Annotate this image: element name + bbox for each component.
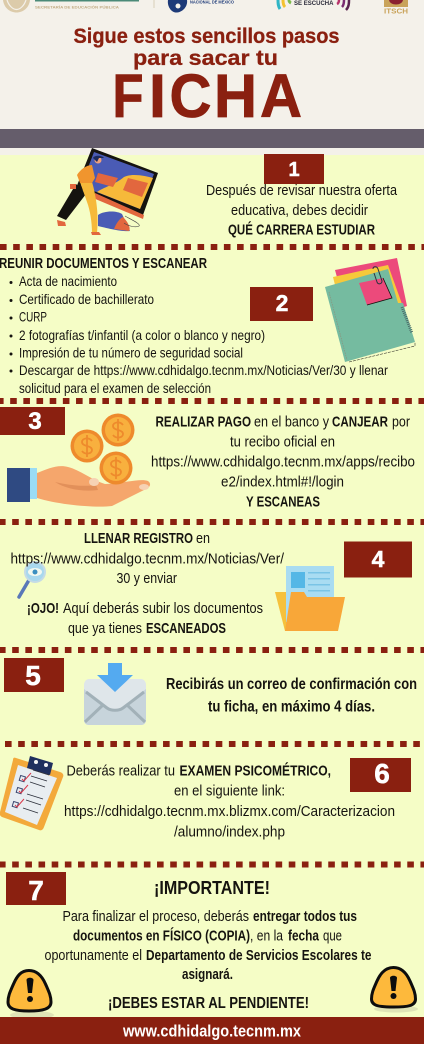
logo: Tecnológico Nacional de México (168, 0, 234, 13)
step 7 text: oportunamente el (44, 947, 142, 964)
step 7 number: 7 (28, 875, 44, 906)
step 7 number (6, 872, 66, 906)
step 2 checklist: CURP (19, 309, 47, 325)
title: A (260, 62, 302, 130)
header band (0, 0, 424, 155)
step 5 text: tu ficha, en máximo 4 días. (208, 699, 375, 716)
icon: envelope with arrow (84, 663, 146, 725)
step 3 text: en el banco y (254, 414, 329, 431)
icon: magnifying glass (19, 562, 45, 597)
step 6 (0, 756, 411, 841)
step 1 text: QUÉ CARRERA ESTUDIAR (228, 222, 375, 238)
callout: stay alert: ¡DEBES ESTAR AL PENDIENTE! (108, 995, 309, 1012)
step 7 text: fecha (288, 928, 320, 945)
illustration: person at board (57, 148, 158, 235)
step 6 number (350, 758, 411, 792)
logo: ITSCH (384, 0, 408, 16)
title: I (149, 62, 166, 130)
step 3 text (151, 414, 415, 511)
icon: open folder with document (275, 566, 345, 631)
title: Sigue estos sencillos pasos (74, 25, 340, 48)
step 2 checklist: solicitud para el examen de selección (19, 380, 211, 396)
step 2 heading: REUNIR DOCUMENTOS Y ESCANEAR (0, 255, 207, 272)
step 4 text: 30 y enviar (116, 570, 177, 587)
step 6 text (64, 763, 395, 841)
icon: warning left (8, 970, 54, 1019)
step 1 number: 1 (288, 159, 300, 181)
step 3 text: tu recibo oficial en (230, 434, 335, 451)
step 6 text: https://cdhidalgo.tecnm.mx.blizmx.com/Caracterizacion (64, 803, 395, 820)
step 4 text: LLENAR REGISTRO (84, 530, 193, 547)
step 3 number (0, 407, 65, 435)
step 5 number (4, 658, 64, 692)
step 2 number: 2 (276, 290, 288, 316)
step 3 text: Y ESCANEAS (246, 494, 320, 511)
step 5 text (166, 676, 417, 716)
step 1 text (206, 182, 398, 238)
footer: www.cdhidalgo.tecnm.mx (122, 1022, 301, 1041)
step 7 heading: ¡IMPORTANTE! (154, 878, 270, 898)
step 2 checklist: Impresión de tu número de seguridad social (19, 345, 243, 361)
step 3 text: REALIZAR PAGO (156, 414, 251, 431)
step 4 (10, 530, 412, 637)
footer (0, 1017, 424, 1044)
logo: Secretaría de Educación Pública (3, 0, 154, 12)
step 4 text: en (196, 530, 210, 547)
step 4 text: ESCANEADOS (146, 620, 226, 637)
step 7 text: , en la (250, 928, 284, 945)
logo: ITSCH: ITSCH (384, 8, 408, 16)
step 2 checklist: 2 fotografías t/infantil (a color o blanco y negro) (19, 327, 265, 343)
title: H (214, 62, 257, 130)
step 4 text: ¡OJO! (27, 600, 59, 617)
step 5 number: 5 (25, 660, 41, 691)
step 4 number (344, 542, 412, 578)
title (74, 25, 340, 130)
logo: Secretaría de Educación Pública: SECRETARÍA DE EDUCACIÓN PÚBLICA (35, 4, 120, 10)
step 4 text (10, 530, 285, 637)
step 6 text: en el siguiente link: (174, 783, 285, 800)
step 7 text: que (323, 928, 342, 945)
icon: hand with coins (7, 414, 150, 507)
step 4 number: 4 (372, 546, 385, 572)
title: C (170, 62, 212, 130)
step 3 (0, 407, 415, 511)
step 6 text: /alumno/index.php (174, 824, 285, 841)
step 7 text: Para finalizar el proceso, deberás (62, 908, 249, 925)
step 6 text: EXAMEN PSICOMÉTRICO, (180, 763, 331, 780)
step 3 text: por (392, 414, 410, 431)
step 2 number (250, 287, 313, 321)
logo: se escucha: SE ESCUCHA (294, 1, 334, 7)
step 1 text: educativa, debes decidir (231, 202, 368, 219)
step 7 text: entregar todos tus (253, 908, 357, 925)
step 3 text: CANJEAR (332, 414, 388, 431)
icon: warning right (372, 968, 418, 1012)
dotted dividers (0, 247, 424, 864)
step 3 text: e2/index.html#!/login (221, 474, 344, 491)
step 7 text: Departamento de Servicios Escolares te (146, 947, 372, 964)
step 2 (0, 255, 415, 396)
step 4 text: https://www.cdhidalgo.tecnm.mx/Noticias/Ver/ (10, 550, 285, 567)
step 1 (57, 148, 398, 238)
step 7 (6, 872, 418, 1019)
logo: se escucha (278, 0, 349, 10)
step 2 checklist: Acta de nacimiento (19, 273, 117, 289)
step 4 text: que ya tienes (68, 620, 142, 637)
step 1 number (264, 154, 324, 184)
step 6 text: Deberás realizar tu (66, 763, 175, 780)
icon: folder with notes (325, 258, 415, 362)
step 7 text: documentos en FÍSICO (COPIA) (73, 928, 250, 945)
step 3 number: 3 (28, 408, 42, 435)
step 5 (4, 658, 417, 725)
title: F (112, 62, 144, 130)
step 7 text: asignará. (182, 966, 233, 983)
title: para sacar tu (133, 47, 278, 70)
step 4 text: Aquí deberás subir los documentos (63, 600, 263, 617)
step 2 checklist (10, 273, 388, 396)
step 2 checklist: Certificado de bachillerato (19, 291, 154, 307)
step 6 number: 6 (374, 758, 390, 789)
step 7 text (44, 908, 372, 983)
icon: clipboard (0, 756, 63, 830)
